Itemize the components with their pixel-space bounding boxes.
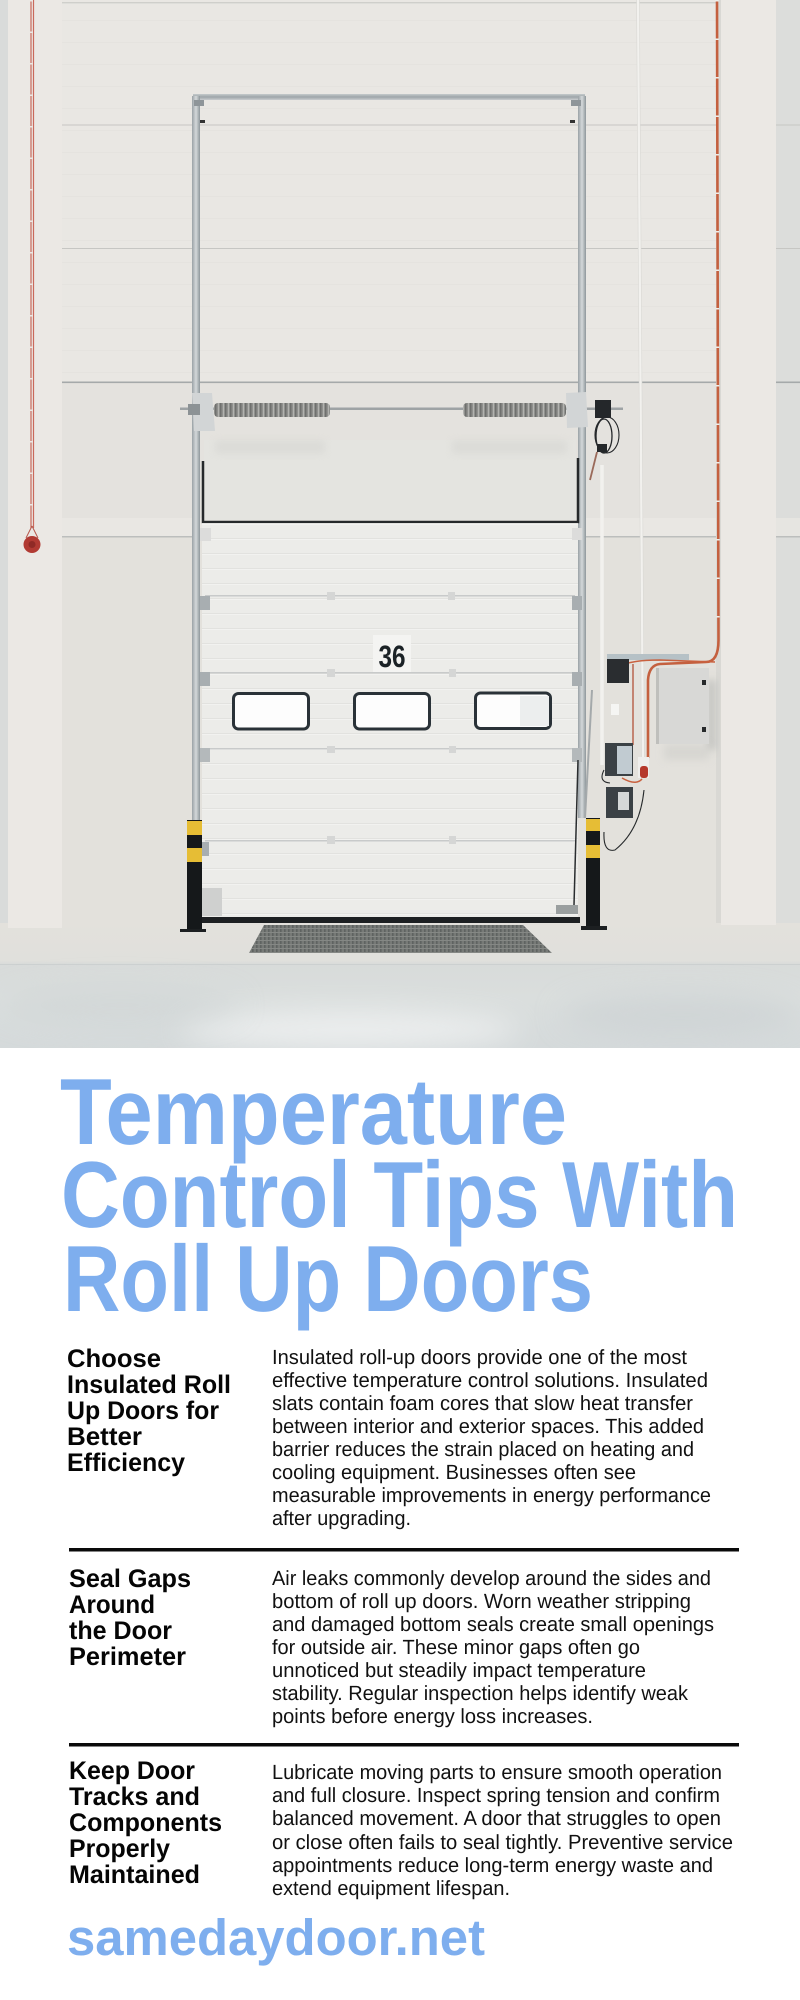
heading: seal gaps xyxy=(69,1565,191,1671)
heading: maintenance: Tracks and xyxy=(69,1783,200,1811)
wall panels xyxy=(0,0,800,930)
body text: seal gaps: and damaged bottom seals create small openings xyxy=(272,1613,714,1636)
title: Temperature xyxy=(60,1059,567,1164)
title: Roll Up Doors xyxy=(63,1226,593,1331)
body text: insulated doors: barrier reduces the strain placed on heating and xyxy=(272,1438,694,1461)
upper opening curtain xyxy=(202,458,580,524)
roll up door panel xyxy=(200,523,592,923)
body text: seal gaps: for outside air. These minor gaps often go xyxy=(272,1636,640,1659)
section 1: insulated doors xyxy=(67,1345,711,1530)
body text: seal gaps xyxy=(272,1567,714,1728)
heading: choose insulated doors: Up Doors for xyxy=(67,1397,219,1425)
heading: maintenance xyxy=(69,1757,222,1889)
body text: maintenance: appointments reduce long-term energy waste and xyxy=(272,1854,713,1877)
body text: maintenance: Lubricate moving parts to ensure smooth operation xyxy=(272,1761,722,1784)
safety bollards xyxy=(180,818,607,932)
floor mat xyxy=(249,925,552,953)
body text: seal gaps: bottom of roll up doors. Worn weather stripping xyxy=(272,1590,691,1613)
heading: seal gaps: the Door xyxy=(69,1617,172,1645)
heading: maintenance: Keep Door xyxy=(69,1757,195,1785)
body text: insulated doors: effective temperature control solutions. Insulated xyxy=(272,1369,708,1392)
body text: maintenance: extend equipment lifespan. xyxy=(272,1877,510,1900)
body text: maintenance xyxy=(272,1761,733,1900)
heading: choose insulated doors: Better xyxy=(67,1423,142,1451)
motor and cable xyxy=(590,400,619,480)
alarm cable and bell xyxy=(24,0,40,553)
body text: seal gaps: stability. Regular inspection helps identify weak xyxy=(272,1682,689,1705)
white conduits xyxy=(602,0,643,765)
spring shaft xyxy=(180,392,623,431)
heading: seal gaps: Perimeter xyxy=(69,1643,186,1671)
heading: choose insulated doors: Choose xyxy=(67,1345,161,1373)
title xyxy=(60,1059,738,1331)
heading: seal gaps: Seal Gaps xyxy=(69,1565,191,1593)
body text: seal gaps: points before energy loss increases. xyxy=(272,1705,593,1728)
body text: maintenance: or close often fails to seal tightly. Preventive service xyxy=(272,1831,733,1854)
body text: seal gaps: unnoticed but steadily impact temperature xyxy=(272,1659,646,1682)
body text: insulated doors: cooling equipment. Businesses often see xyxy=(272,1461,636,1484)
heading: seal gaps: Around xyxy=(69,1591,155,1619)
floor xyxy=(0,921,800,1048)
body text: insulated doors: between interior and exterior spaces. This added xyxy=(272,1415,704,1438)
heading: choose insulated doors xyxy=(67,1345,231,1477)
body text: insulated doors: Insulated roll-up doors provide one of the most xyxy=(272,1346,687,1369)
door windows xyxy=(234,693,550,729)
photo: warehouse roll up door xyxy=(0,0,800,1048)
pillars xyxy=(716,0,776,923)
body text: insulated doors: measurable improvements in energy performance xyxy=(272,1484,711,1507)
heading: choose insulated doors: Insulated Roll xyxy=(67,1371,231,1399)
body text: seal gaps: Air leaks commonly develop around the sides and xyxy=(272,1567,711,1590)
heading: maintenance: Components xyxy=(69,1809,222,1837)
heading: choose insulated doors: Efficiency xyxy=(67,1449,186,1477)
door frame xyxy=(192,94,586,820)
section 2: seal gaps xyxy=(69,1565,714,1728)
body text: insulated doors: after upgrading. xyxy=(272,1507,411,1530)
body text: insulated doors: slats contain foam cores that slow heat transfer xyxy=(272,1392,693,1415)
website url: samedaydoor.net xyxy=(67,1909,485,1966)
electrical equipment xyxy=(602,654,716,850)
body text: insulated doors xyxy=(272,1346,711,1530)
body text: maintenance: balanced movement. A door that struggles to open xyxy=(272,1807,721,1830)
heading: maintenance: Maintained xyxy=(69,1861,200,1889)
section 3: maintenance xyxy=(69,1757,733,1900)
red conduit xyxy=(648,0,718,758)
heading: maintenance: Properly xyxy=(69,1835,171,1863)
door number 36: 36 xyxy=(378,639,406,674)
body text: maintenance: and full closure. Inspect spring tension and confirm xyxy=(272,1784,720,1807)
